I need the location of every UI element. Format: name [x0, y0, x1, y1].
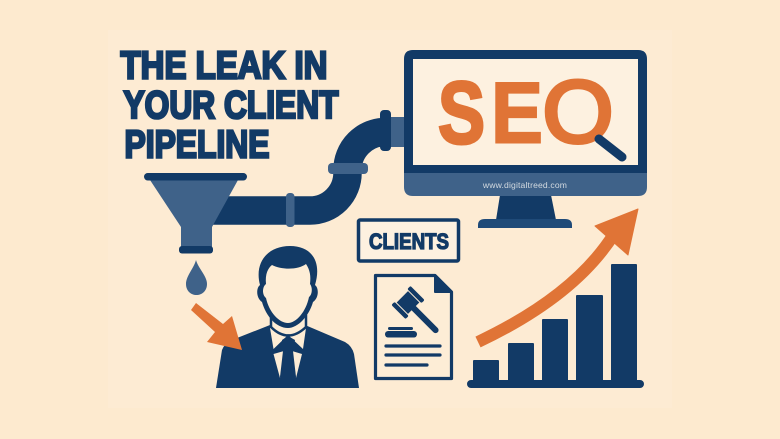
legal document [376, 275, 452, 378]
pipe [205, 110, 405, 227]
SEO wordmark: O [542, 62, 614, 161]
icon: gavel [391, 286, 445, 340]
gavel block [385, 327, 417, 338]
SEO wordmark [438, 62, 614, 162]
SEO wordmark: S [438, 63, 485, 162]
title [120, 44, 339, 166]
person [216, 246, 359, 388]
monitor [404, 50, 647, 228]
funnel [144, 173, 247, 254]
tie [280, 336, 296, 388]
icon: magnifier handle [599, 139, 622, 157]
title: YOUR CLIENT [124, 84, 339, 127]
clients label: CLIENTS [369, 229, 449, 254]
website url: www.digitaltreed.com [482, 180, 567, 190]
growth arrow [478, 209, 638, 342]
title: PIPELINE [124, 124, 270, 166]
monitor stand [478, 195, 572, 228]
head [257, 246, 318, 328]
document text lines [386, 346, 440, 365]
bar chart [467, 264, 644, 388]
SEO wordmark: E [491, 66, 543, 162]
title: THE LEAK IN [120, 44, 328, 88]
shirt collar [270, 328, 306, 349]
icon: water drop [186, 260, 207, 295]
orange arrow [191, 303, 242, 350]
neck [271, 316, 306, 336]
clients label [358, 220, 458, 261]
